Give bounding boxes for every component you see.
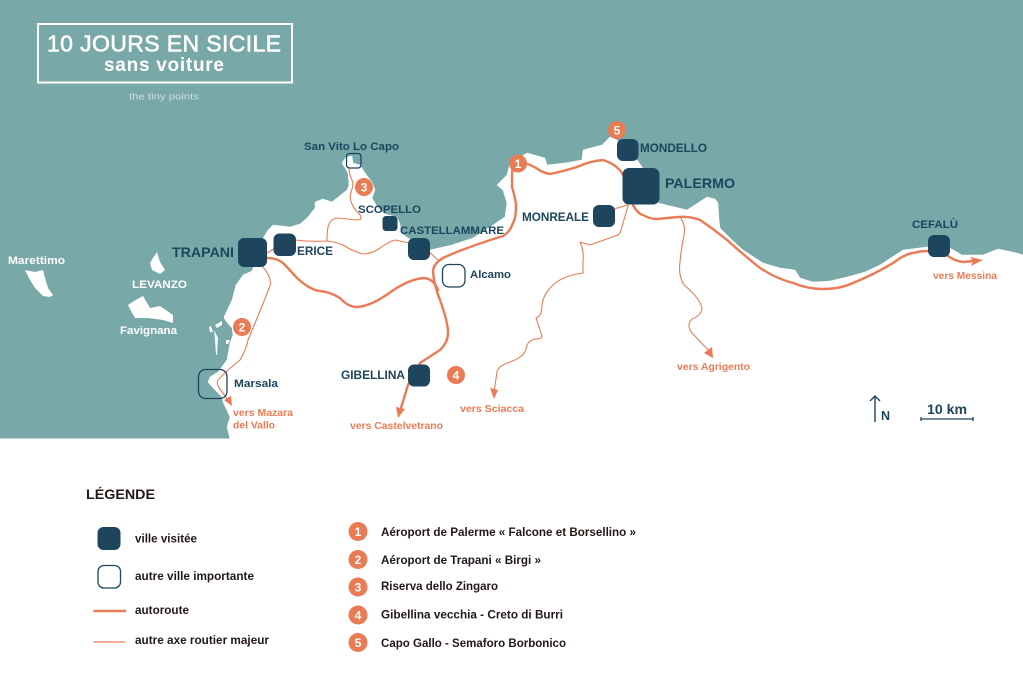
- city labels: PALERMO: [665, 175, 735, 191]
- island labels: Favignana: [120, 325, 178, 337]
- island labels: LEVANZO: [132, 279, 187, 291]
- legend: numbered places: 1: [355, 525, 362, 539]
- islands: Stagnone: [209, 321, 230, 355]
- numbered map markers: 3: [361, 180, 368, 194]
- legend: symbols: autre axe routier majeur: [135, 635, 270, 647]
- icon: north arrow: N: [881, 409, 890, 423]
- credit: the tiny points: [129, 92, 199, 102]
- city labels: San Vito Lo Capo: [304, 141, 399, 153]
- numbered map markers: 4: [453, 368, 460, 382]
- legend: numbered places: 2: [355, 553, 362, 567]
- legend: numbered places: 5: [355, 636, 362, 650]
- title: 10 JOURS EN SICILE: [47, 30, 281, 56]
- legend: numbered places: 3: [355, 580, 362, 594]
- visited city markers: [238, 139, 950, 386]
- city labels: TRAPANI: [172, 244, 234, 260]
- legend: symbols: ville visitée: [135, 534, 197, 546]
- legend: numbered places: Capo Gallo - Semaforo Borbonico: [381, 638, 566, 650]
- island: Favignana: [128, 296, 173, 323]
- scale bar: 10 km: [927, 402, 967, 417]
- island labels: [8, 255, 187, 337]
- legend: numbered places: [348, 522, 636, 652]
- roads: major secondary roads: [217, 168, 710, 403]
- title: sans voiture: [104, 55, 224, 76]
- city labels: MONREALE: [522, 212, 589, 224]
- legend: symbols: autoroute: [135, 605, 189, 617]
- heading: legend: LÉGENDE: [86, 487, 155, 502]
- city labels: CEFALÙ: [912, 218, 958, 231]
- destination labels: vers Mazara: [233, 407, 293, 419]
- other city markers: [198, 154, 465, 398]
- arrow heads: [224, 257, 983, 418]
- numbered map markers: 1: [515, 157, 522, 171]
- city labels: CASTELLAMMARE: [400, 225, 504, 237]
- icon: north arrow: [870, 396, 890, 423]
- destination labels: vers Sciacca: [460, 403, 524, 415]
- numbered map markers: 5: [614, 124, 621, 138]
- destination labels: del Vallo: [233, 420, 275, 432]
- legend: symbols: [94, 527, 270, 647]
- scale bar: [921, 402, 973, 421]
- numbered map markers: [233, 121, 626, 384]
- legend: numbered places: Aéroport de Trapani « Birgi »: [381, 555, 541, 567]
- legend: numbered places: Gibellina vecchia - Creto di Burri: [381, 610, 563, 622]
- destination labels: vers Messina: [933, 270, 997, 282]
- island labels: Marettimo: [8, 255, 65, 267]
- destination labels: [233, 270, 997, 432]
- land: Sicily: [208, 137, 1023, 439]
- city labels: Alcamo: [470, 269, 511, 281]
- island: Levanzo: [150, 252, 165, 274]
- title: [38, 24, 292, 82]
- city labels: SCOPELLO: [358, 204, 421, 216]
- panel: map sea background: [0, 0, 1023, 438]
- city labels: GIBELLINA: [341, 368, 405, 382]
- city labels: ERICE: [297, 246, 333, 258]
- destination labels: vers Agrigento: [677, 361, 750, 373]
- city labels: [172, 141, 958, 390]
- destination labels: vers Castelvetrano: [350, 420, 443, 432]
- roads: motorways: [267, 160, 974, 411]
- legend: numbered places: Aéroport de Palerme « Falcone et Borsellino »: [381, 527, 636, 539]
- legend: numbered places: 4: [355, 608, 362, 622]
- legend: symbols: autre ville importante: [135, 571, 254, 583]
- numbered map markers: 2: [239, 320, 246, 334]
- city labels: MONDELLO: [640, 143, 707, 155]
- island: Marettimo: [25, 270, 53, 297]
- legend: numbered places: Riserva dello Zingaro: [381, 581, 498, 593]
- city labels: Marsala: [234, 378, 279, 390]
